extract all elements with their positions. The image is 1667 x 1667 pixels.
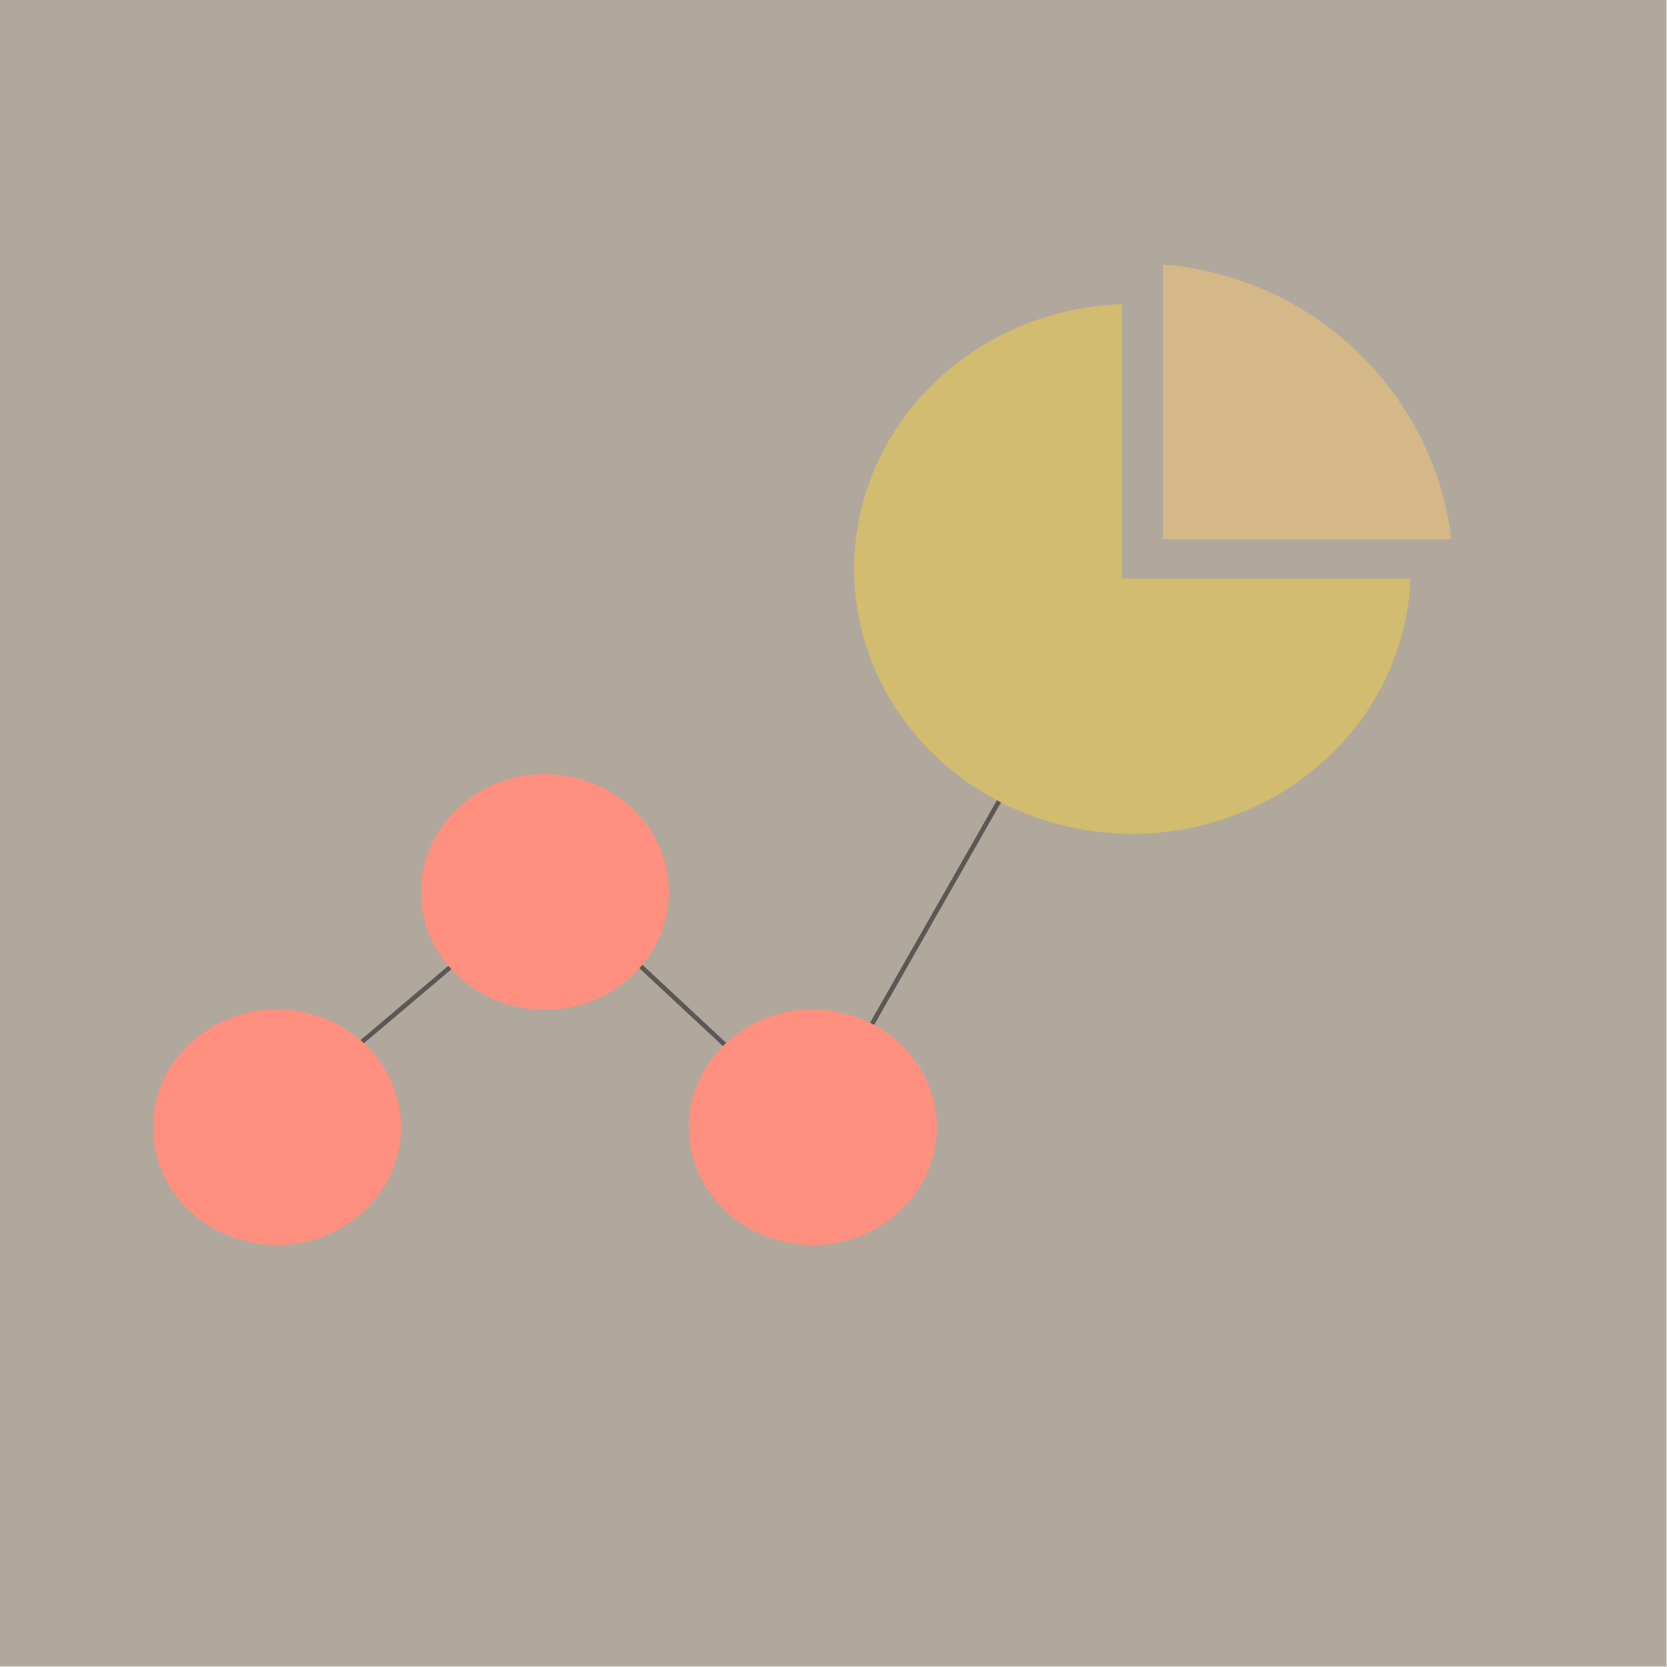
- node: right circle: [689, 1009, 937, 1245]
- pie slice: large yellow three-quarter sector: [854, 304, 1410, 834]
- connector: middle node to right node: [634, 960, 731, 1050]
- connector: left node to middle node: [355, 962, 457, 1048]
- pie chart: [854, 264, 1452, 834]
- pie slice: detached tan quarter sector: [1163, 264, 1452, 539]
- node: left circle: [153, 1009, 401, 1245]
- node: middle circle: [421, 774, 669, 1010]
- connector: right node to pie chart: [868, 796, 1002, 1031]
